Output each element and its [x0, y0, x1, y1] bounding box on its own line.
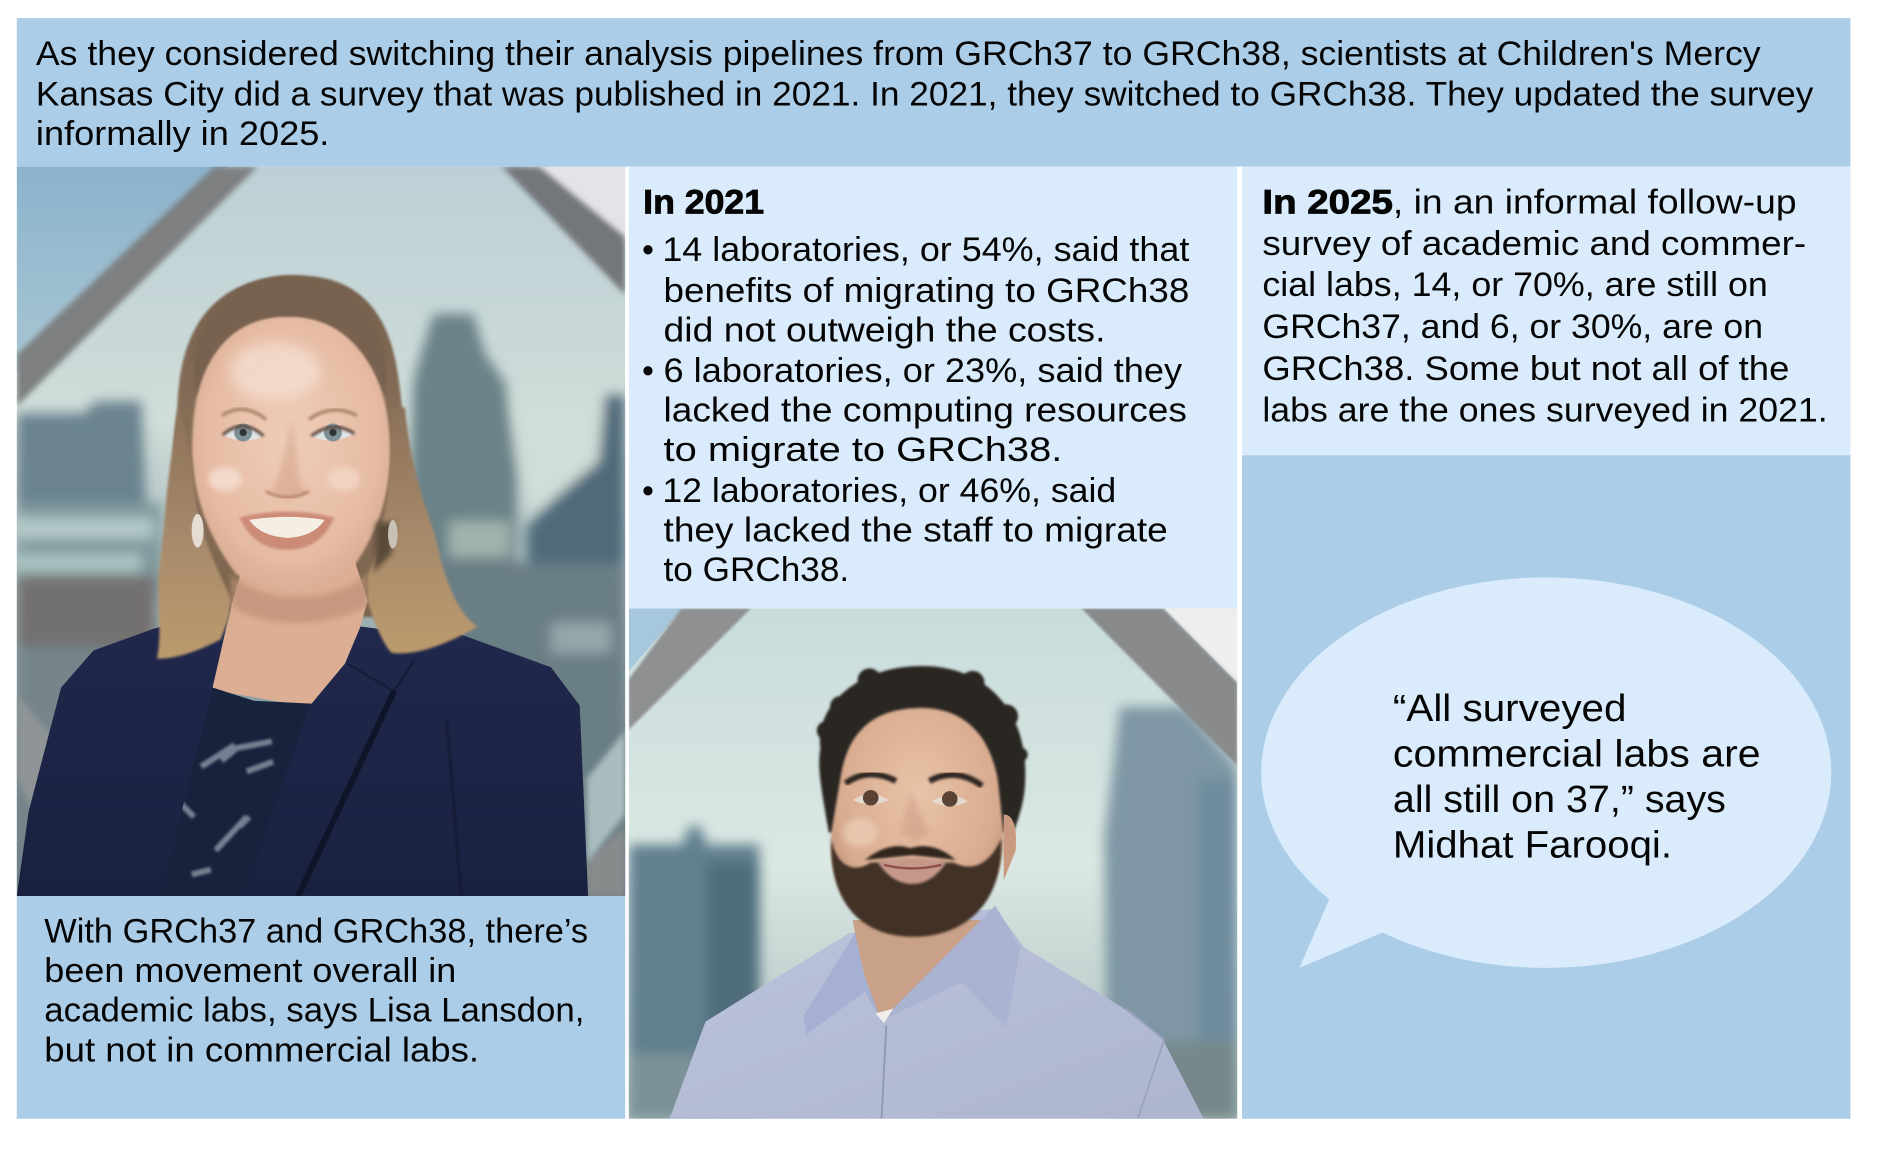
speech bubble: Midhat Farooqi quote: “All surveyed	[1393, 687, 1626, 729]
intro banner: informally in 2025.	[36, 115, 329, 153]
intro banner: Kansas City did a survey that was published in 2021. In 2021, they switched to GRCh38. They updated the survey	[36, 75, 1813, 113]
panel: in 2021 findings: •	[642, 352, 654, 390]
caption: Lisa Lansdon: been movement overall in	[44, 952, 456, 990]
panel: in 2021 findings: 6 laboratories, or 23%, said they	[664, 352, 1182, 390]
skyline	[629, 707, 1237, 1119]
woman's eyes	[222, 409, 357, 441]
man's hair	[817, 666, 1028, 833]
speech bubble: Midhat Farooqi quote: Midhat Farooqi.	[1393, 824, 1672, 866]
panel: in 2021 findings: benefits of migrating to GRCh38	[664, 272, 1189, 310]
panel: in 2021 findings: lacked the computing resources	[664, 392, 1187, 430]
earrings	[192, 514, 204, 547]
speech bubble: Midhat Farooqi quote	[1261, 577, 1831, 968]
neck and chest	[212, 557, 368, 707]
hair back	[174, 275, 407, 617]
panel: in 2021 findings: did not outweigh the costs.	[664, 311, 1105, 349]
window frame beams	[629, 609, 1237, 765]
panel: in 2025 findings: In 2025	[1262, 183, 1393, 221]
intro banner	[17, 18, 1850, 167]
photo: Midhat Farooqi	[629, 609, 1237, 1119]
neck	[853, 920, 995, 1021]
window frame beams	[17, 167, 625, 896]
panel: in 2021 findings: to migrate to GRCh38.	[664, 431, 1062, 469]
speech bubble: Midhat Farooqi quote: all still on 37,” says	[1393, 778, 1726, 820]
caption: Lisa Lansdon: but not in commercial labs.	[44, 1031, 479, 1069]
panel: quote background	[1242, 455, 1850, 1119]
hair top strands	[194, 276, 387, 395]
panel: in 2025 findings: GRCh37, and 6, or 30%, are on	[1262, 308, 1763, 346]
man's eyes	[846, 774, 982, 807]
caption: Lisa Lansdon	[17, 896, 625, 1119]
speech bubble: Midhat Farooqi quote: commercial labs are	[1393, 733, 1761, 775]
photo: Lisa Lansdon	[17, 167, 625, 896]
collar	[804, 933, 882, 1035]
hair lock left	[157, 407, 231, 659]
panel: in 2021 findings: 14 laboratories, or 54%, said that	[662, 231, 1190, 269]
panel: in 2021 findings: they lacked the staff to migrate	[664, 511, 1168, 549]
panel: in 2025 findings	[1242, 167, 1850, 455]
panel: in 2021 findings: •	[642, 472, 654, 510]
hair lock right	[368, 407, 478, 653]
panel: in 2021 findings: •	[642, 231, 654, 269]
jacket	[17, 606, 231, 896]
dark hair shadow behind ear	[374, 522, 395, 573]
intro banner: As they considered switching their analysis pipelines from GRCh37 to GRCh38, scientists at Children's Mercy	[36, 35, 1761, 73]
panel: in 2025 findings: GRCh38. Some but not all of the	[1262, 350, 1789, 388]
skyline	[17, 314, 625, 896]
panel: in 2021 findings	[629, 167, 1237, 609]
face	[192, 316, 390, 591]
caption: Lisa Lansdon: academic labs, says Lisa Lansdon,	[44, 992, 584, 1030]
panel: in 2025 findings: , in an informal follow-up	[1393, 183, 1797, 221]
woman's smile	[240, 491, 334, 550]
caption: Lisa Lansdon: With GRCh37 and GRCh38, there’s	[44, 913, 588, 951]
panel: in 2025 findings: survey of academic and commer-	[1262, 225, 1806, 263]
man's face	[830, 706, 1004, 884]
panel: in 2021 findings: to GRCh38.	[664, 551, 849, 589]
beard	[831, 838, 1001, 937]
heading: in 2021: In 2021	[643, 183, 764, 221]
panel: in 2025 findings: cial labs, 14, or 70%, are still on	[1262, 266, 1768, 304]
shirt	[670, 908, 1204, 1119]
panel: in 2025 findings: labs are the ones surveyed in 2021.	[1262, 392, 1828, 430]
blouse	[160, 688, 312, 896]
panel: in 2021 findings: 12 laboratories, or 46%, said	[662, 472, 1116, 510]
